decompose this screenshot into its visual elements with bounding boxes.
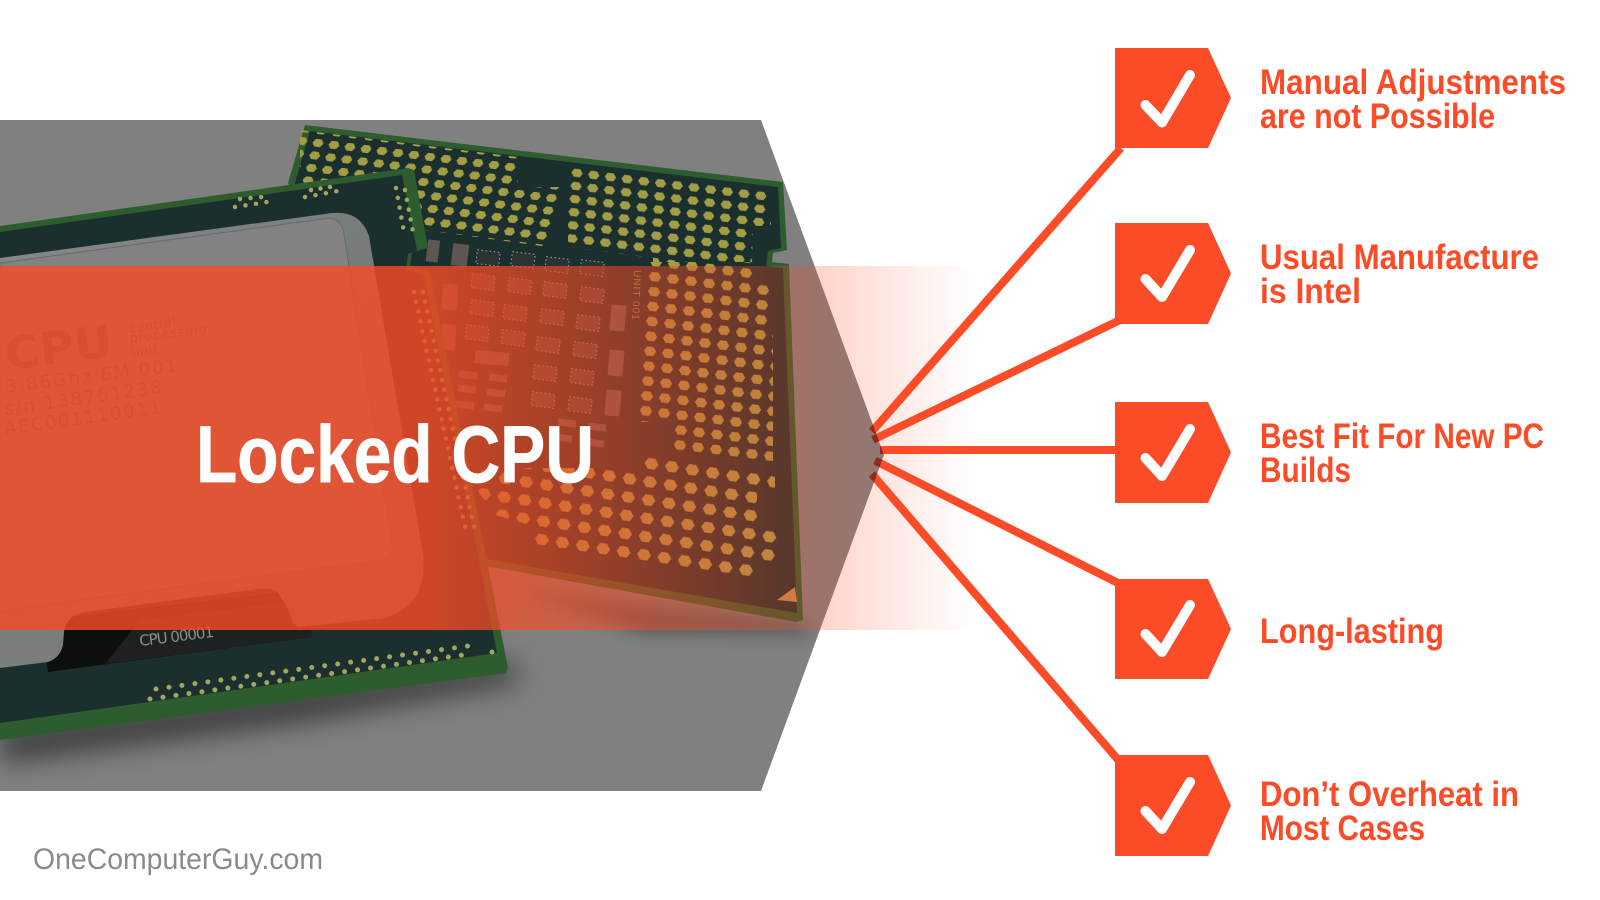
item: usual manufacture: Usual Manufacture <box>1260 238 1539 277</box>
translucent orange title band <box>0 266 975 630</box>
panel: cpu photo <box>0 120 900 791</box>
item: overheat: Don’t Overheat in <box>1260 775 1519 814</box>
lid engraved markings: processing <box>129 322 208 347</box>
lid engraved markings: 3.86Ghz 6M 001 <box>4 355 178 398</box>
silver heat spreader lid <box>0 213 424 668</box>
item: manual adjustments <box>1115 48 1566 148</box>
lid engraved markings: AEC001110011 <box>3 397 162 440</box>
item: best fit <box>1115 402 1544 503</box>
lid engraved markings: central <box>128 315 177 337</box>
connector line ends over panel <box>869 424 884 482</box>
item: long-lasting <box>1115 579 1444 679</box>
chip marking: unit: UNIT 001 <box>629 270 642 321</box>
item: usual manufacture <box>1115 223 1539 324</box>
item: manual adjustments: are not Possible <box>1260 97 1495 136</box>
lid engraved markings: s/n 138761238 <box>3 377 163 420</box>
lid engraved markings <box>2 315 208 440</box>
pad dots <box>150 187 492 699</box>
front cpu chip <box>0 168 508 740</box>
connector lines <box>872 148 1121 762</box>
capacitors and resistors <box>426 239 627 448</box>
back cpu chip <box>288 125 803 622</box>
die label: CPU 00001 <box>138 623 215 650</box>
item: overheat: Most Cases <box>1260 809 1425 848</box>
title: Locked CPU <box>196 410 594 500</box>
lid engraved markings: CPU <box>2 315 116 381</box>
item: overheat <box>1115 755 1519 856</box>
item: best fit: Builds <box>1260 451 1351 490</box>
item: usual manufacture: is Intel <box>1260 272 1361 311</box>
item: best fit: Best Fit For New PC <box>1260 417 1544 456</box>
chip shadows <box>0 590 812 762</box>
black die strip <box>46 626 312 672</box>
item: manual adjustments: Manual Adjustments <box>1260 63 1566 102</box>
watermark: OneComputerGuy.com <box>33 843 323 876</box>
item: long-lasting: Long-lasting <box>1260 612 1444 651</box>
surface components <box>465 250 604 413</box>
lid engraved markings: unit <box>130 342 159 361</box>
